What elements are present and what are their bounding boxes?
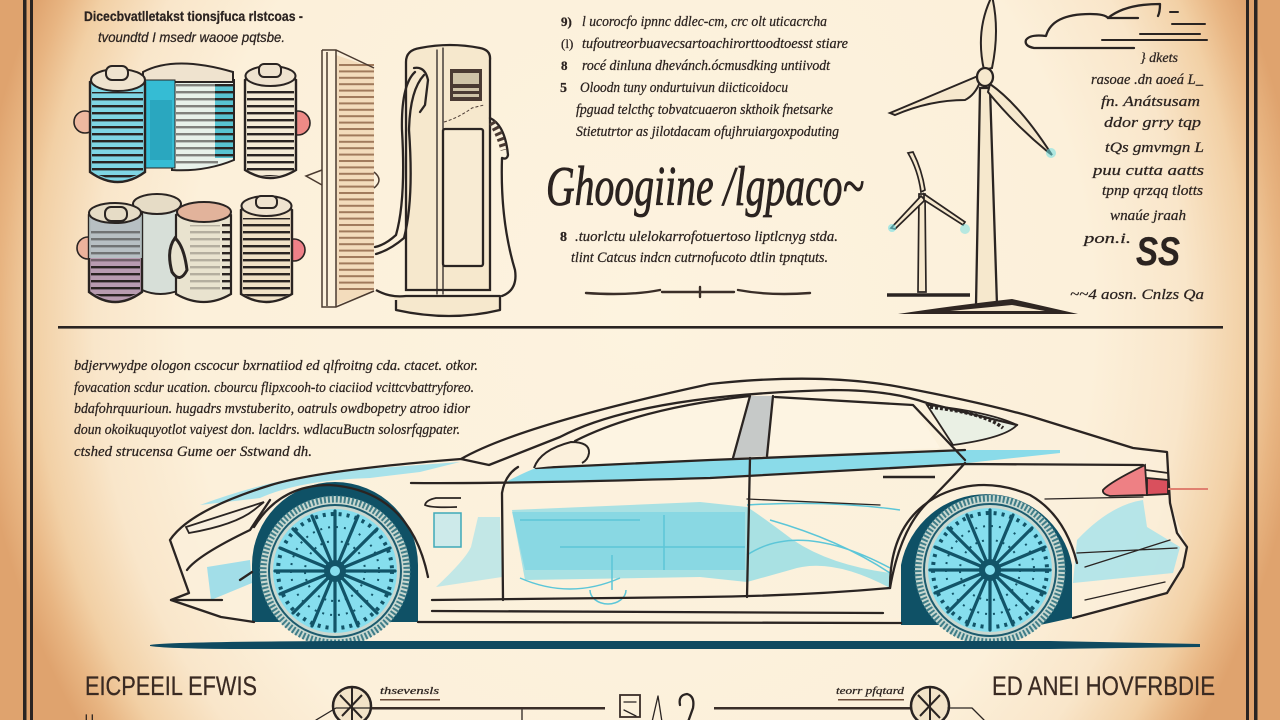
text block: car description: ctshed strucensa Gume oer Sstwand dh. <box>74 444 312 460</box>
icon: left circle <box>333 687 371 720</box>
icons: bottom center <box>620 694 693 720</box>
pump base <box>376 290 500 316</box>
internal mechanical traces <box>520 503 900 604</box>
icon: front blue battery <box>90 74 145 182</box>
icon: battery right red nub <box>286 111 310 135</box>
text block: right column notes: ddor grry tqp <box>1104 115 1202 131</box>
heading: bottom right label: ED ANEI HOVFRBDIE <box>992 671 1215 701</box>
label: thsevensls <box>380 686 439 697</box>
icon: right striped battery <box>245 71 296 178</box>
bottom timeline left <box>316 686 605 720</box>
icon: label battery <box>176 206 231 302</box>
text block: car description: fovacation scdur ucation. cbourcu flipxcooh-to ciaciiod vcittcvbattryforeo. <box>74 380 474 396</box>
text block: caption under title: tlint Catcus indcn cutrnofucoto dtlin tpnqtuts. <box>571 250 828 266</box>
door handle <box>425 498 461 507</box>
icon: back battery center <box>142 210 180 294</box>
icon: left pink battery <box>89 208 142 302</box>
grille lines <box>171 500 270 600</box>
icon: battery group top row <box>74 64 310 182</box>
text block: right column notes: SS <box>1136 230 1180 274</box>
section divider <box>58 326 1223 329</box>
car body fill <box>170 378 1187 622</box>
text block: numbered list: 5 <box>560 81 567 96</box>
icon: battery left red nub <box>74 111 96 133</box>
wheel arches <box>254 485 1077 587</box>
ground shadow <box>150 641 1200 649</box>
text block: car description <box>74 358 478 460</box>
icon: right circle <box>911 687 949 720</box>
heading: bottom left label: EICPEEIL EFWIS <box>85 671 257 701</box>
line <box>372 707 605 710</box>
text block: right column notes: wnaúe jraah <box>1110 208 1186 224</box>
hub <box>977 68 993 86</box>
text block: numbered list: (l) <box>561 36 573 51</box>
text block: right column notes: tpnp qrzqq tlotts <box>1102 183 1203 199</box>
rear wheel <box>901 494 1072 645</box>
blades <box>981 0 996 70</box>
headlight <box>186 502 264 533</box>
rear character lines <box>747 497 1177 600</box>
pump body <box>406 45 490 290</box>
door lines <box>502 458 965 600</box>
text block: numbered list: 9) <box>561 14 572 29</box>
bottom timeline right: teorr pfqtard <box>836 686 905 697</box>
text block: battery caption <box>84 8 303 45</box>
text block: right column notes: } dkets <box>1140 51 1178 66</box>
quarter window <box>927 405 1017 445</box>
rear door handle <box>883 476 935 478</box>
pump hoses <box>375 72 415 247</box>
tower <box>976 88 997 305</box>
icon: right striped battery <box>241 201 292 302</box>
blue front ghost <box>436 517 502 587</box>
icon: left nub <box>77 237 99 259</box>
blue hood stripe <box>200 462 460 505</box>
text block: numbered list: rocé dinluna dhevánch.ócmusdking untiivodt <box>582 58 831 74</box>
text block: numbered list: fpguad telcthç tobvatcuaeron skthoik fnetsarke <box>576 102 834 118</box>
windows fill <box>578 396 750 466</box>
text block: right column notes: rasoae .dn aoeá L_ <box>1091 72 1203 88</box>
window pillar <box>733 396 773 458</box>
blue body band <box>504 450 1060 483</box>
text block: battery caption: tvoundtd I msedr waooe pqtsbe. <box>98 29 285 45</box>
icon: cloud <box>1026 4 1207 48</box>
car outline <box>170 379 1187 623</box>
roof inner line <box>461 390 1017 465</box>
small teal panel <box>434 513 461 547</box>
text block: car description: bdafohrquurioun. hugadrs mvstuberito, oatruls owdbopetry atroo idior <box>74 401 470 417</box>
text block: right column notes: tQs gmvmgn L <box>1105 140 1204 156</box>
text block: caption under title: 8 <box>560 230 567 245</box>
text block: numbered list <box>560 14 849 140</box>
text block: right column notes: ~~4 aosn. Cnlzs Qa <box>1070 287 1204 303</box>
text block: caption under title <box>560 229 838 266</box>
blue battery region <box>512 502 890 588</box>
front wheel <box>252 482 418 646</box>
text block: right column notes <box>1070 51 1204 303</box>
icon: back battery white <box>172 80 234 170</box>
icon: striped comb panel <box>306 50 379 307</box>
text block: numbered list: 8 <box>561 58 568 73</box>
icon: large wind turbine <box>890 0 1078 314</box>
base <box>898 299 1078 314</box>
sill lines <box>432 588 890 613</box>
bottom timeline right <box>714 686 984 720</box>
windows outlines <box>575 396 965 460</box>
text block: right column notes: puu cutta aatts <box>1092 163 1204 179</box>
ornament <box>586 287 810 297</box>
text block: car description: doun okoikuquyotlot vaiyest don. lacldrs. wdlacuBuctn solosrfqgpater. <box>74 422 460 438</box>
text block: numbered list: Stietutrtor as jilotdacam ofujhruiargoxpoduting <box>576 124 839 140</box>
illustration: electric car <box>170 378 1208 646</box>
text block: numbered list: tufoutreorbuavecsartoachirorttoodtoesst stiare <box>582 36 849 52</box>
taillight <box>1103 465 1208 496</box>
icon: battery group bottom row <box>77 194 305 302</box>
text block: numbered list: l ucorocfo ipnnc ddlec-cm, crc olt uticacrcha <box>582 14 827 30</box>
heading: script title: Ghoogiine /lgpaco~ <box>546 156 864 218</box>
icon: back battery blue <box>143 64 233 82</box>
text block: car description: bdjervwydpe ologon cscocur bxrnatiiod ed qlfroitng cda. ctacet. otkor. <box>74 358 478 374</box>
text block: caption under title: .tuorlctu ulelokarrofotuertoso liptlcnyg stda. <box>575 229 838 245</box>
blue front panel <box>207 560 252 600</box>
text block: numbered list: Oloodn tuny ondurtuivun diicticoidocu <box>580 80 788 96</box>
blue rear panel <box>1073 500 1180 583</box>
icon: right nub <box>283 239 305 261</box>
belt lines <box>411 450 1143 483</box>
text block: battery caption: Dicecbvatlletakst tionsjfuca rlstcoas - <box>84 8 303 24</box>
text block: right column notes: fn. Anátsusam <box>1101 94 1200 110</box>
mirror <box>534 442 589 468</box>
pump door panel <box>443 129 483 266</box>
pump screen <box>450 69 482 101</box>
text block: right column notes: pon.i. <box>1083 231 1131 247</box>
icon: small wind turbine <box>887 152 970 295</box>
icon: charging station <box>375 45 515 316</box>
